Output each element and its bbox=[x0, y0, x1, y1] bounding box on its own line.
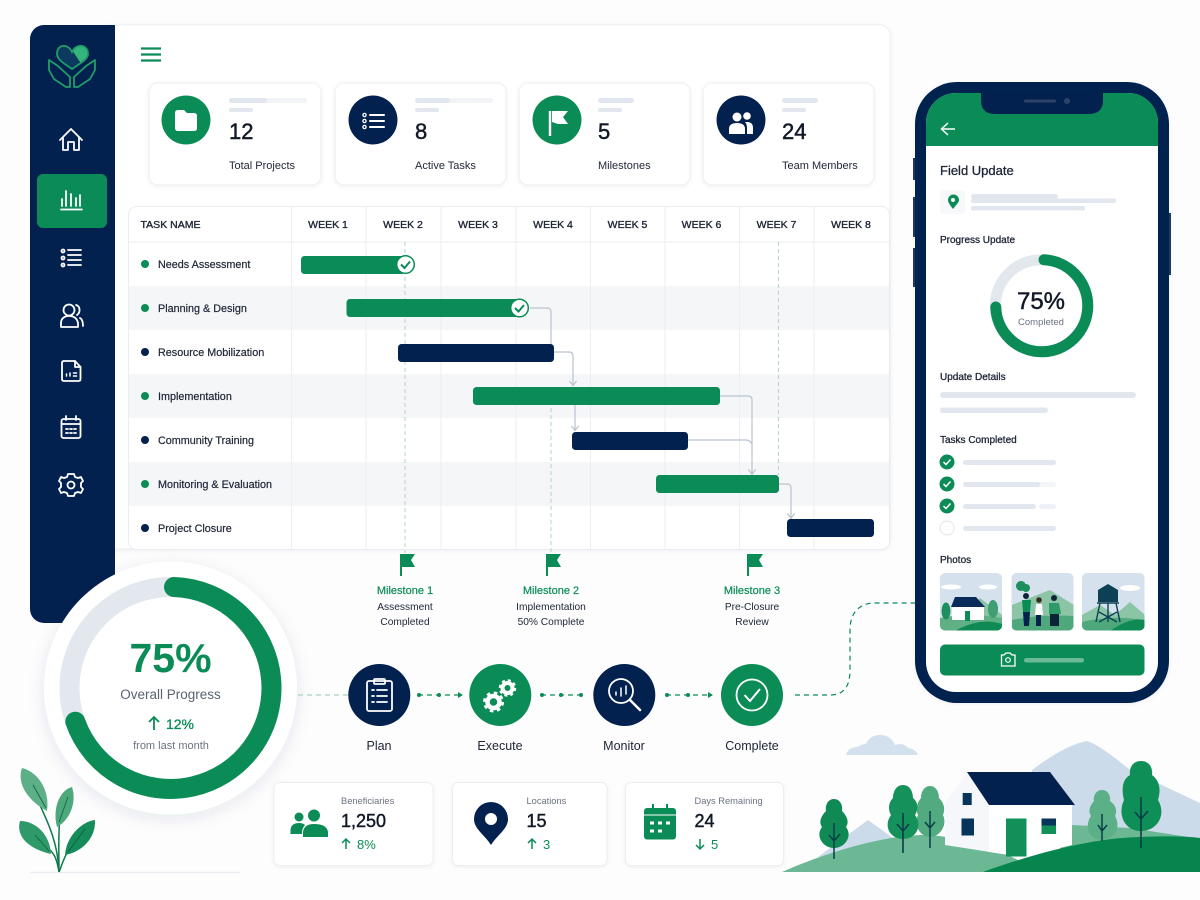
overall progress donut: 12% bbox=[166, 716, 194, 732]
gantt header row: WEEK 6 bbox=[682, 219, 721, 231]
stat card: milestones: Milestones bbox=[598, 160, 651, 172]
stat card: active tasks: 8 bbox=[415, 119, 427, 144]
overall progress donut: 75% bbox=[129, 635, 212, 681]
tree 5 bbox=[1121, 761, 1161, 848]
gantt header row: WEEK 8 bbox=[831, 219, 871, 231]
photo: water tower bbox=[1082, 573, 1145, 631]
phone mockup: Field Update bbox=[940, 163, 1014, 178]
milestone 3 bbox=[724, 554, 780, 628]
right hill bbox=[983, 836, 1200, 872]
icon: calendar bbox=[644, 804, 676, 840]
kpi card: days remaining: 24 bbox=[694, 811, 715, 831]
kpi card: locations: 3 bbox=[543, 837, 550, 852]
stat card: total projects: Total Projects bbox=[229, 160, 296, 172]
icon: calendar bbox=[62, 416, 80, 438]
icon: task list bbox=[62, 250, 81, 266]
step: plan: Plan bbox=[366, 739, 392, 753]
milestone 2: 50% Complete bbox=[518, 617, 585, 628]
gantt header row bbox=[141, 219, 871, 231]
milestone 3: Pre-Closure bbox=[725, 602, 780, 613]
tree 2 bbox=[888, 785, 918, 853]
gantt header row: TASK NAME bbox=[141, 219, 200, 231]
gantt header row: WEEK 3 bbox=[458, 219, 498, 231]
kpi card: beneficiaries: 8% bbox=[357, 837, 376, 852]
gantt task labels bbox=[141, 259, 272, 535]
kpi card: beneficiaries bbox=[274, 782, 433, 866]
icon: users bbox=[61, 304, 83, 327]
dependency connectors bbox=[530, 308, 794, 518]
step: complete bbox=[721, 664, 783, 753]
icon: map pin bbox=[474, 802, 508, 845]
phone progress donut: 75% bbox=[1017, 288, 1065, 315]
logo: heart in caring hands bbox=[49, 44, 95, 87]
phone mockup: Progress Update bbox=[940, 235, 1015, 246]
kpi card: locations: 15 bbox=[526, 811, 547, 831]
active nav item: chart bbox=[37, 174, 107, 228]
milestone 1: Completed bbox=[380, 617, 430, 628]
step: complete: Complete bbox=[725, 739, 779, 753]
stat card: active tasks bbox=[335, 83, 506, 185]
photo: house bbox=[940, 573, 1002, 631]
gantt header row: WEEK 2 bbox=[383, 219, 423, 231]
kpi card: days remaining bbox=[626, 782, 784, 866]
illustration: plant bbox=[19, 768, 240, 872]
phone mockup: Update Details bbox=[940, 372, 1006, 383]
stat card: milestones bbox=[519, 83, 690, 185]
kpi card: locations bbox=[452, 782, 607, 866]
task checklist bbox=[940, 454, 1056, 535]
stat card: team members bbox=[703, 83, 874, 185]
step: execute: Execute bbox=[477, 739, 523, 753]
tree 1 bbox=[819, 799, 849, 859]
milestone 1: Assessment bbox=[377, 602, 433, 613]
gantt task labels: Resource Mobilization bbox=[158, 347, 264, 359]
phone body bbox=[915, 82, 1169, 703]
gantt chart bbox=[128, 206, 890, 553]
gantt task labels: Project Closure bbox=[158, 523, 232, 535]
stat card: milestones: 5 bbox=[598, 119, 610, 144]
phone mockup bbox=[913, 82, 1171, 703]
location row bbox=[940, 190, 1116, 214]
icon: report bbox=[62, 361, 80, 381]
stat card: active tasks: Active Tasks bbox=[415, 160, 476, 172]
stat card: total projects bbox=[149, 83, 321, 185]
cloud bbox=[846, 735, 918, 755]
stat card: total projects: 12 bbox=[229, 119, 253, 144]
kpi card: locations: Locations bbox=[526, 796, 567, 806]
stat card: team members: 24 bbox=[782, 119, 806, 144]
gantt header row: WEEK 7 bbox=[757, 219, 796, 231]
photo: community group bbox=[1012, 573, 1074, 631]
overall progress donut bbox=[44, 562, 297, 814]
phone mockup: Tasks Completed bbox=[940, 435, 1017, 446]
process flow connectors bbox=[298, 603, 915, 698]
main dashboard panel bbox=[100, 25, 890, 549]
tree 3 bbox=[916, 786, 944, 848]
gantt task labels: Community Training bbox=[158, 435, 254, 447]
illustration: village landscape bbox=[782, 735, 1200, 872]
milestone 1: Milestone 1 bbox=[377, 585, 433, 597]
gantt header row: WEEK 4 bbox=[533, 219, 573, 231]
overall progress donut: from last month bbox=[133, 740, 209, 752]
gantt task labels: Planning & Design bbox=[158, 303, 247, 315]
kpi card: days remaining: 5 bbox=[711, 837, 718, 852]
phone side buttons bbox=[913, 158, 1171, 287]
icon: settings gear bbox=[59, 474, 83, 496]
completed check badges bbox=[397, 256, 528, 317]
stat card: team members: Team Members bbox=[782, 160, 858, 172]
icon: hamburger menu bbox=[141, 48, 161, 60]
gantt header row: WEEK 5 bbox=[608, 219, 647, 231]
phone header bbox=[926, 92, 1158, 146]
kpi card: beneficiaries: Beneficiaries bbox=[341, 796, 395, 806]
photo upload button bbox=[940, 644, 1144, 676]
icon: home bbox=[60, 129, 82, 150]
kpi card: beneficiaries: 1,250 bbox=[341, 811, 386, 831]
step: monitor: Monitor bbox=[603, 739, 645, 753]
milestone 2: Implementation bbox=[516, 602, 586, 613]
gantt bars bbox=[301, 256, 874, 537]
sidebar bbox=[30, 25, 115, 623]
milestone 1 bbox=[377, 554, 433, 628]
step: plan bbox=[348, 664, 410, 753]
gantt task labels: Needs Assessment bbox=[158, 259, 250, 271]
tree 4 bbox=[1088, 790, 1117, 841]
milestone 3: Review bbox=[735, 617, 769, 628]
phone mockup: Photos bbox=[940, 555, 971, 566]
icon: people bbox=[290, 810, 328, 837]
gantt header row: WEEK 1 bbox=[308, 219, 348, 231]
phone progress donut bbox=[995, 260, 1088, 352]
step: execute bbox=[469, 664, 531, 753]
kpi card: days remaining: Days Remaining bbox=[694, 796, 763, 806]
overall progress donut: Overall Progress bbox=[120, 687, 221, 702]
step: monitor bbox=[593, 664, 655, 753]
gantt task labels: Implementation bbox=[158, 391, 232, 403]
milestone 3: Milestone 3 bbox=[724, 585, 780, 597]
update details placeholder lines bbox=[940, 392, 1136, 413]
mountains bbox=[818, 741, 1200, 860]
gantt task labels: Monitoring & Evaluation bbox=[158, 479, 272, 491]
house bbox=[945, 772, 1075, 857]
left hill bbox=[782, 835, 1040, 872]
milestone 2: Milestone 2 bbox=[523, 585, 579, 597]
milestone dashed guides bbox=[405, 242, 778, 553]
milestone 2 bbox=[516, 554, 586, 628]
phone progress donut: Completed bbox=[1018, 317, 1064, 328]
